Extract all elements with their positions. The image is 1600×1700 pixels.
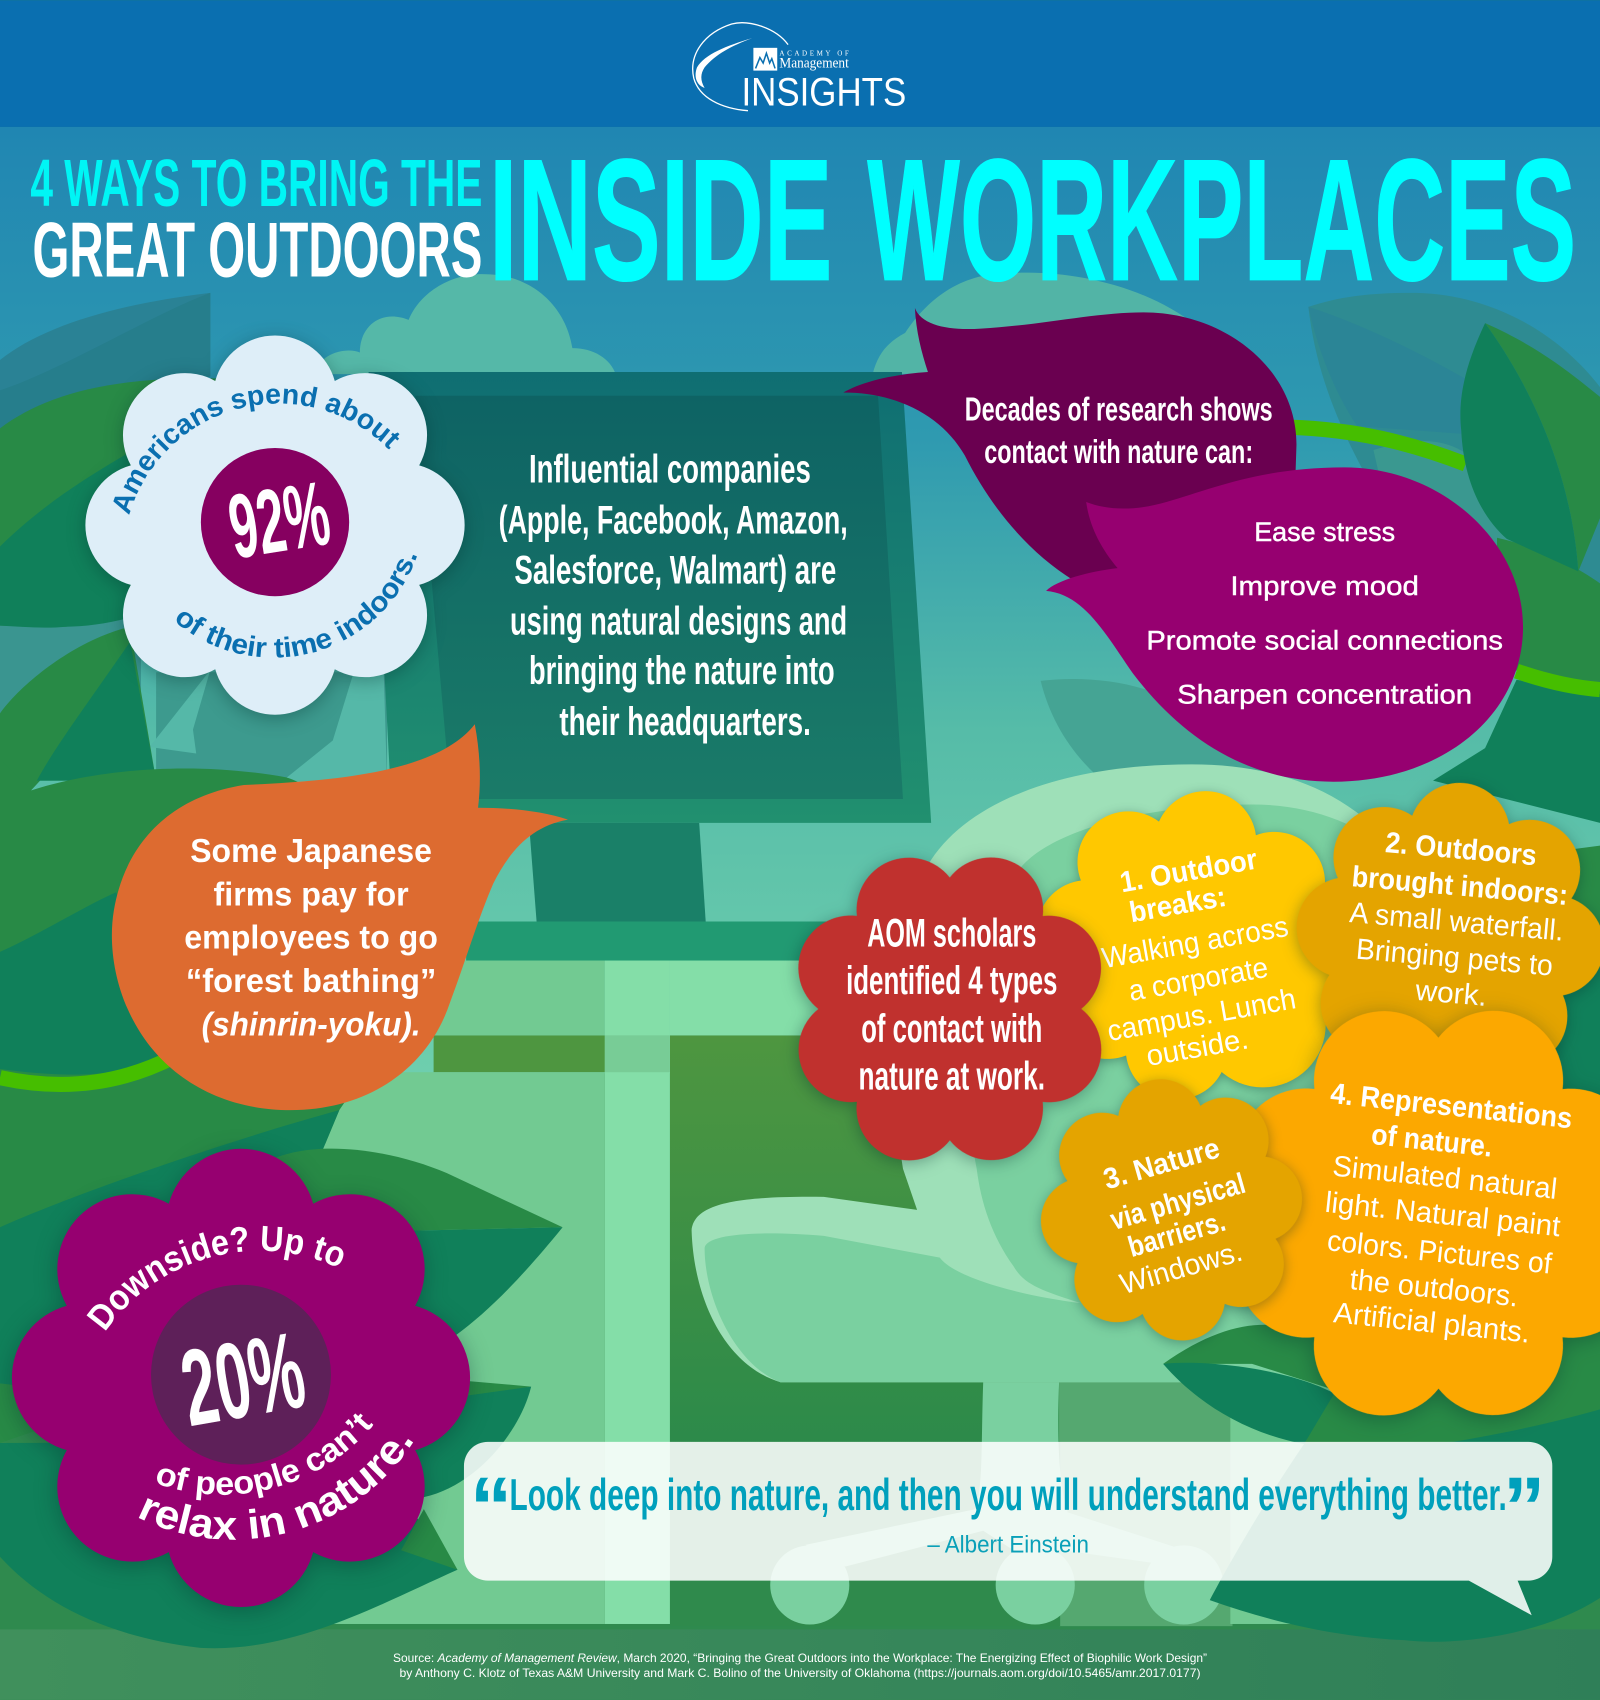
yellow flower: 1 outdoor breaks: breaks: xyxy=(1127,881,1229,929)
vine line right xyxy=(1517,671,1600,690)
yellow flower: 1 outdoor breaks: campus. Lunch xyxy=(1105,983,1298,1048)
speech leaf: decades of research: contact with nature can: xyxy=(984,434,1253,471)
yellow flower: 1 outdoor breaks: Walking across xyxy=(1100,911,1291,975)
red flower: AOM scholars: identified 4 types xyxy=(846,959,1057,1003)
footer source: Source: Academy of Management Review, March 2020, “Bringing the Great Outdoors into the Workplace: The Energizing Effect of Biophilic Work Design” xyxy=(393,1651,1207,1665)
gold flower: 3 physical barriers: Windows. xyxy=(1116,1236,1246,1301)
flower: 20% stat: relax in nature. xyxy=(138,1439,414,1540)
orange speech leaf: “forest bathing” xyxy=(186,963,436,1000)
footer source xyxy=(393,1651,1207,1680)
monitor text xyxy=(499,448,848,744)
chair xyxy=(692,764,1409,1625)
red flower: AOM scholars xyxy=(741,800,1158,1218)
monitor text: Salesforce, Walmart) are xyxy=(514,548,836,592)
red flower: AOM scholars: AOM scholars xyxy=(867,911,1036,955)
vine line lower left xyxy=(0,1057,173,1084)
orange speech leaf: (shinrin-yoku). xyxy=(202,1006,421,1043)
logo: Management xyxy=(779,54,849,71)
orange flower: 4 representations: Simulated natural xyxy=(1331,1150,1559,1206)
flower: 20% stat: 20% xyxy=(173,1309,313,1449)
orange flower: 4 representations: light. Natural paint xyxy=(1323,1187,1562,1243)
quote bubble: ” xyxy=(1503,1459,1545,1554)
flower: 20% stat: of people can’t xyxy=(157,1414,374,1500)
gold flower: 3 physical barriers: via physical xyxy=(1107,1168,1249,1237)
gold flower: 3 physical barriers: barriers. xyxy=(1125,1206,1229,1264)
logo: INSIGHTS xyxy=(741,70,906,114)
yellow flower: 1 outdoor breaks: outside. xyxy=(1144,1023,1251,1073)
title: GREAT OUTDOORS xyxy=(33,206,482,294)
gold flower: 2 outdoors brought indoors: brought indoors: xyxy=(1350,861,1569,912)
logo xyxy=(693,23,906,114)
flower: 92% stat: 92% xyxy=(222,463,336,578)
gold flower: 2 outdoors brought indoors: 2. Outdoors xyxy=(1384,827,1538,872)
orange flower: 4 representations xyxy=(1160,935,1600,1492)
speech leaf: benefits list: Improve mood xyxy=(1230,570,1419,601)
lower left leaves xyxy=(0,1110,563,1648)
monitor text: Influential companies xyxy=(529,448,811,492)
orange speech leaf: employees to go xyxy=(184,920,438,957)
orange flower: 4 representations: colors. Pictures of xyxy=(1326,1225,1554,1281)
orange flower: 4 representations: of nature. xyxy=(1370,1119,1494,1164)
title: 4 WAYS TO BRING THE xyxy=(30,146,482,221)
logo: ACADEMY OF xyxy=(779,50,849,58)
flower: 20% stat xyxy=(4,1148,482,1618)
red flower: AOM scholars: of contact with xyxy=(861,1007,1042,1051)
flower: 92% stat: of their time indoors. xyxy=(176,554,417,658)
flower: 20% stat: Downside? Up to xyxy=(86,1226,344,1330)
orange speech leaf: Some Japanese xyxy=(190,833,432,870)
orange flower: 4 representations: 4. Representations xyxy=(1329,1078,1574,1135)
title xyxy=(30,123,1576,317)
quote bubble: “ xyxy=(470,1459,512,1554)
gold flower: 2 outdoors brought indoors: Bringing pets to xyxy=(1355,934,1554,983)
quote bubble xyxy=(464,1442,1552,1615)
speech leaf: benefits list: Ease stress xyxy=(1254,516,1395,547)
title: INSIDE xyxy=(489,123,833,317)
monitor text: bringing the nature into xyxy=(529,649,835,693)
speech leaf: benefits list: Promote social connections xyxy=(1146,624,1503,655)
speech leaf: benefits list: Sharpen concentration xyxy=(1177,679,1472,710)
right leaves xyxy=(1163,323,1600,1642)
monitor xyxy=(369,372,931,961)
speech leaf: benefits list xyxy=(1046,467,1523,782)
header band xyxy=(0,0,1600,127)
flower: 92% stat: Americans spend about xyxy=(113,386,400,515)
monitor text: using natural designs and xyxy=(510,599,847,643)
orange speech leaf: firms pay for xyxy=(214,876,409,913)
vine line upper right xyxy=(1290,427,1466,464)
speech leaf: decades of research: Decades of research shows xyxy=(965,392,1273,429)
gold flower: 2 outdoors brought indoors: work. xyxy=(1413,975,1488,1013)
left leaves xyxy=(0,378,386,1227)
gold flower: 3 physical barriers xyxy=(1025,1064,1318,1356)
flower: 92% stat xyxy=(80,331,468,725)
gold flower: 2 outdoors brought indoors xyxy=(1283,770,1600,1104)
speech leaf: decades of research xyxy=(843,308,1296,580)
quote bubble: – Albert Einstein xyxy=(927,1531,1089,1558)
monitor text: (Apple, Facebook, Amazon, xyxy=(499,498,848,542)
monitor text: their headquarters. xyxy=(559,700,811,744)
orange speech leaf xyxy=(112,724,568,1110)
yellow flower: 1 outdoor breaks: 1. Outdoor xyxy=(1118,844,1260,899)
orange flower: 4 representations: Artificial plants. xyxy=(1332,1297,1532,1350)
red flower: AOM scholars: nature at work. xyxy=(859,1055,1045,1099)
desk and wall xyxy=(314,961,1360,1626)
yellow flower: 1 outdoor breaks: a corporate xyxy=(1126,952,1271,1008)
footer source: by Anthony C. Klotz of Texas A&M University and Mark C. Bolino of the University of Oklahoma (https://journals.aom.org/doi/10.5465/amr.2017.0177) xyxy=(399,1666,1201,1680)
gold flower: 2 outdoors brought indoors: A small waterfall. xyxy=(1348,897,1565,948)
gold flower: 3 physical barriers: 3. Nature xyxy=(1100,1133,1223,1196)
footer band xyxy=(0,1629,1600,1700)
yellow flower: 1 outdoor breaks xyxy=(1016,770,1366,1121)
orange flower: 4 representations: the outdoors. xyxy=(1348,1264,1520,1313)
